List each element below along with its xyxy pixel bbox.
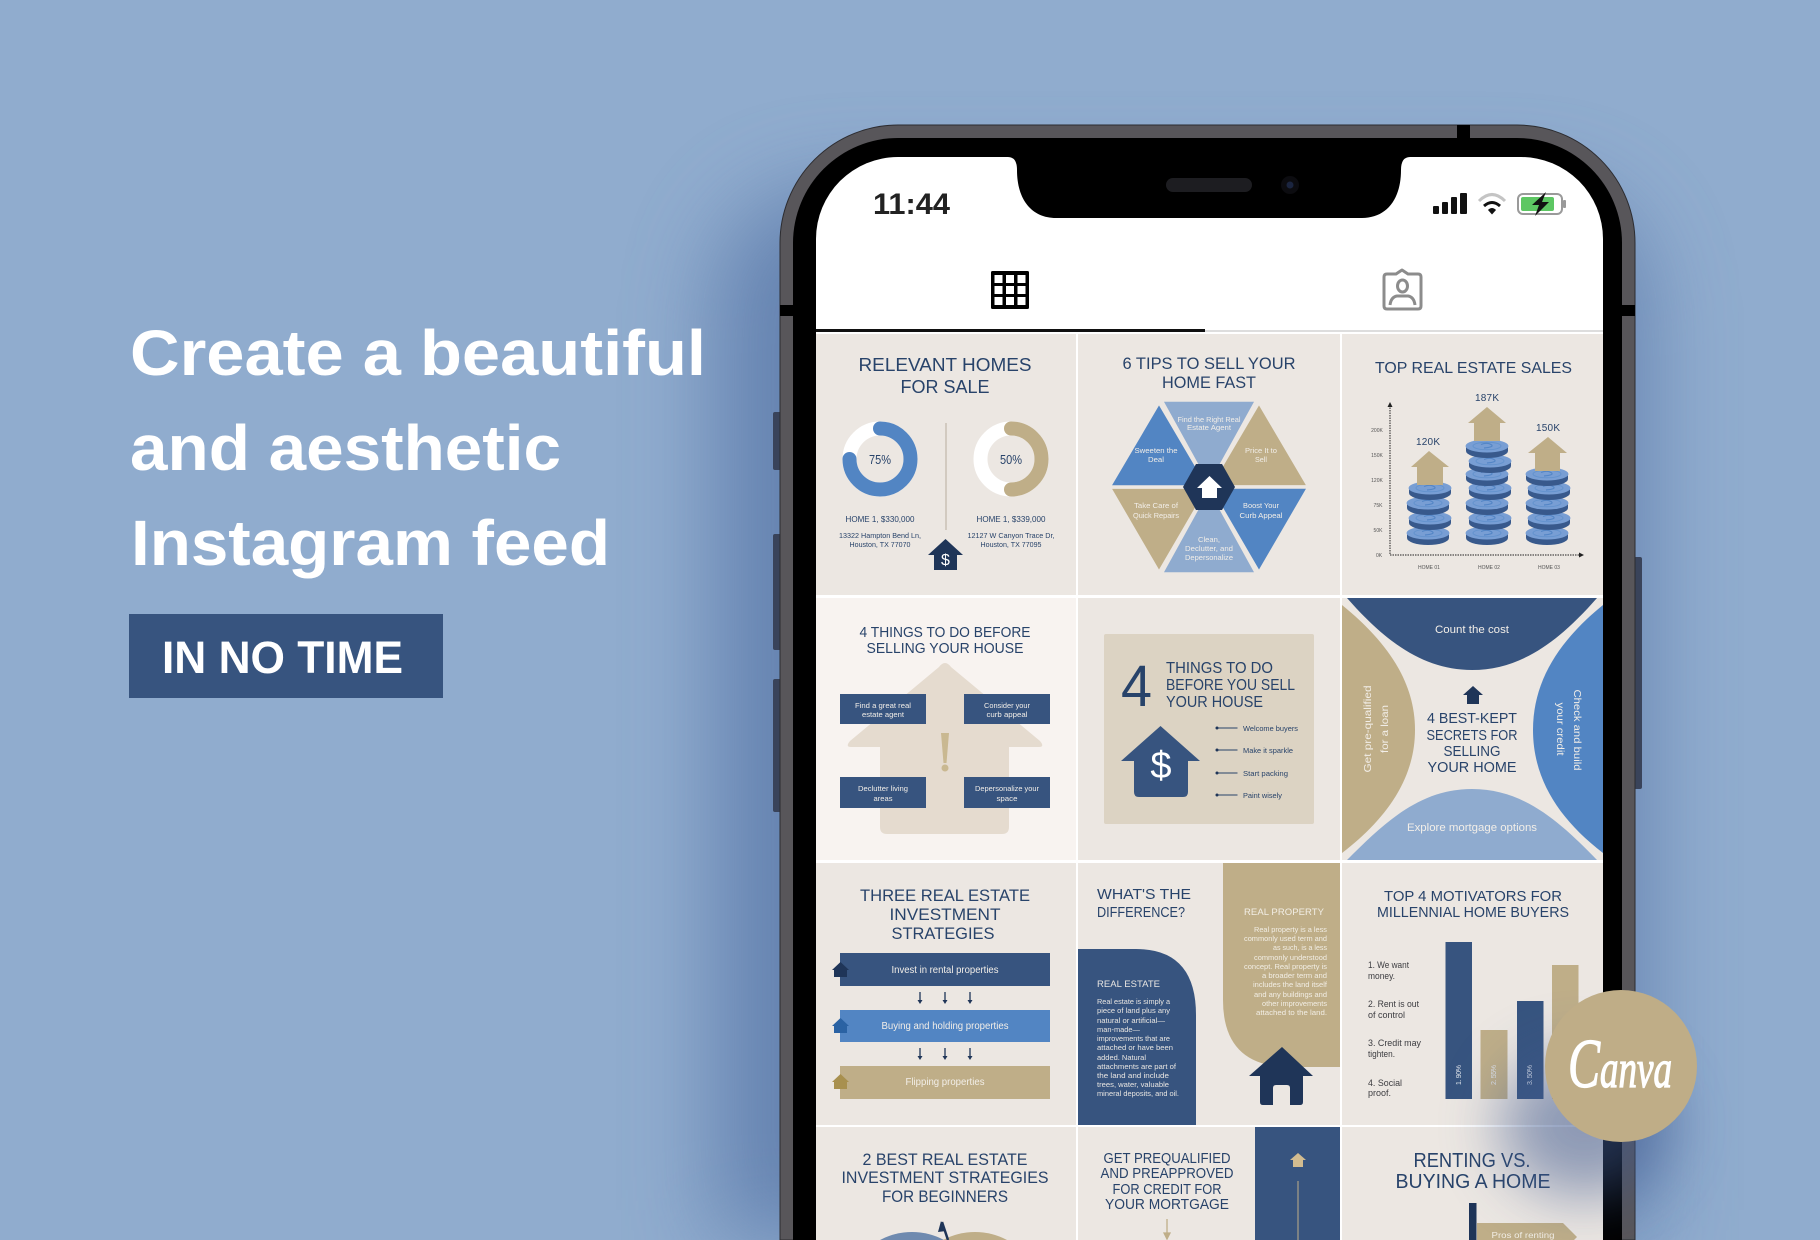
- strategy bars: [832, 953, 1050, 1099]
- title: 4 THINGS TO DO BEFORE: [860, 625, 1031, 641]
- panel: real estate: improvements that are: [1097, 1034, 1170, 1043]
- checklist: Welcome buyers: [1243, 724, 1298, 733]
- shape: check credit: [1533, 605, 1603, 853]
- shape: explore mortgage: Explore mortgage options: [1407, 822, 1538, 834]
- post: six tips: [1078, 334, 1340, 595]
- axis labels: 75K: [1374, 503, 1383, 509]
- title: RENTING VS.: [1414, 1150, 1530, 1172]
- badge: canva logo: [1545, 990, 1697, 1142]
- panel: real property: commonly understood: [1254, 953, 1327, 962]
- title: 2 BEST REAL ESTATE: [862, 1150, 1028, 1169]
- title: STRATEGIES: [892, 924, 994, 943]
- hexagon labels: Estate Agent: [1187, 423, 1232, 432]
- icon: dollar house: [1121, 726, 1200, 797]
- coin stack 1: [1406, 437, 1452, 545]
- title: THINGS TO DO: [1166, 660, 1273, 677]
- home details: HOME 1, $330,000: [846, 514, 915, 524]
- strategy labels: Invest in rental properties: [892, 965, 998, 976]
- arrow down: [1164, 1219, 1170, 1239]
- panel: real estate: [1078, 949, 1196, 1125]
- coin stack 3: 150K: [1536, 423, 1560, 434]
- motivators list: proof.: [1368, 1088, 1391, 1098]
- post: 2 best strategies: [816, 1127, 1076, 1240]
- step labels: Declutter living: [858, 784, 908, 793]
- motivators list: of control: [1368, 1010, 1405, 1020]
- icon: signal: [1433, 193, 1467, 214]
- signpost: [1469, 1203, 1577, 1240]
- panel: real property: a broader term and: [1262, 971, 1327, 980]
- title: [842, 1150, 1048, 1206]
- coin stack 1: 120K: [1416, 437, 1440, 448]
- side panel with arrow: [1255, 1127, 1340, 1240]
- title: YOUR MORTGAGE: [1105, 1196, 1229, 1213]
- title: [1100, 1150, 1234, 1213]
- title: YOUR HOME: [1428, 759, 1516, 776]
- bar chart: [1446, 942, 1578, 1099]
- post: relevant homes: [816, 334, 1076, 595]
- tab underline: [816, 329, 1603, 332]
- panel: real property: REAL PROPERTY: [1244, 907, 1325, 918]
- title: THREE REAL ESTATE: [860, 886, 1030, 905]
- post: top 4 motivators: [1342, 863, 1603, 1125]
- axis labels: HOME 01: [1418, 565, 1440, 571]
- panel: real estate: trees, water, valuable: [1097, 1080, 1169, 1089]
- title: 4 BEST-KEPT: [1427, 710, 1517, 727]
- side buttons: [773, 412, 1642, 812]
- panel: real property: attached to the land.: [1256, 1008, 1327, 1017]
- panel: real estate: natural or artificial—: [1097, 1016, 1165, 1025]
- title: [1377, 888, 1569, 921]
- title: FOR SALE: [900, 377, 990, 397]
- title: TOP 4 MOTIVATORS FOR: [1384, 888, 1562, 905]
- hexagon labels: Boost Your: [1243, 501, 1279, 510]
- title: [1396, 1150, 1550, 1193]
- donut 50 percent: 50%: [1000, 452, 1022, 467]
- shape: count the cost: [1347, 598, 1597, 670]
- strategy labels: Buying and holding properties: [882, 1021, 1008, 1032]
- step labels: Find a great real: [855, 701, 911, 710]
- step labels: [855, 701, 1039, 803]
- title: [1097, 886, 1191, 921]
- canva shadow: [1500, 1053, 1670, 1197]
- status time: 11:44: [873, 188, 950, 221]
- icon: arrow: [1463, 686, 1483, 704]
- shape: check credit: your credit: [1554, 703, 1566, 756]
- motivators list: 4. Social: [1368, 1078, 1402, 1088]
- hexagon labels: Sell: [1255, 455, 1267, 464]
- checklist: Make it sparkle: [1243, 746, 1293, 755]
- hexagon labels: Clean,: [1198, 535, 1220, 544]
- panel: real estate: Real estate is simply a: [1097, 997, 1171, 1006]
- axes: [1390, 405, 1581, 555]
- panel: real property: Real property is a less: [1254, 925, 1327, 934]
- title: INVESTMENT: [890, 905, 1000, 924]
- motivators list: money.: [1368, 971, 1395, 981]
- home details: Houston, TX 77095: [980, 540, 1042, 549]
- motivators list: tighten.: [1368, 1049, 1395, 1059]
- checklist: Start packing: [1243, 769, 1288, 778]
- shape: count the cost: Count the cost: [1435, 624, 1509, 636]
- panel: real property: concept. Real property is: [1244, 962, 1327, 971]
- panel: real estate: added. Natural: [1097, 1053, 1146, 1062]
- panel: real property: commonly used term and: [1244, 934, 1327, 943]
- title: SELLING YOUR HOUSE: [866, 641, 1024, 657]
- axis labels: [1371, 428, 1560, 571]
- home details: 12127 W Canyon Trace Dr,: [968, 531, 1054, 540]
- hexagon labels: Sweeten the: [1134, 446, 1178, 455]
- post: what's the difference: [1078, 863, 1340, 1125]
- panel: real estate: man-made—: [1097, 1025, 1140, 1034]
- title: [860, 627, 1030, 653]
- title: YOUR HOUSE: [1166, 694, 1263, 711]
- panel: real estate: piece of land plus any: [1097, 1006, 1170, 1015]
- title: AND PREAPPROVED: [1100, 1165, 1234, 1182]
- axis labels: 150K: [1371, 453, 1383, 459]
- panel: real property: as such, is a less: [1273, 943, 1327, 952]
- home details: HOME 1, $339,000: [976, 514, 1046, 524]
- hexagon labels: Deal: [1148, 455, 1164, 464]
- icon: dollar house: $: [1150, 745, 1172, 787]
- step labels: Depersonalize your: [975, 784, 1039, 793]
- headline: Instagram feed: [131, 507, 610, 579]
- panel: real estate: attachments are part of: [1097, 1062, 1177, 1071]
- icon: house: [1249, 1047, 1313, 1105]
- shape: get pre-qualified: Get pre-qualified: [1362, 685, 1374, 772]
- title: [860, 358, 1031, 393]
- notch: [1008, 157, 1410, 218]
- badge: in no time: IN NO TIME: [162, 632, 403, 683]
- post: get prequalified: [1078, 1127, 1340, 1240]
- strategy labels: Flipping properties: [906, 1077, 984, 1088]
- axis labels: HOME 03: [1538, 565, 1560, 571]
- icon: dollar house: [928, 539, 963, 570]
- panel: real property: includes the land itself: [1253, 980, 1328, 989]
- bar chart: 1. 90%: [1456, 1065, 1463, 1085]
- hexagon labels: Find the Right Real: [1178, 415, 1241, 424]
- motivators list: 3. Credit may: [1368, 1038, 1421, 1048]
- hexagon labels: [1133, 415, 1283, 562]
- badge: in no time: [129, 614, 443, 698]
- step labels: areas: [874, 794, 893, 803]
- shape: explore mortgage: [1347, 789, 1597, 860]
- axis labels: HOME 02: [1478, 565, 1500, 571]
- checklist: [1216, 724, 1298, 800]
- panel: real estate: the land and include: [1097, 1071, 1169, 1080]
- step labels: space: [996, 794, 1018, 803]
- title: [1166, 662, 1295, 707]
- motivators list: [1368, 960, 1421, 1098]
- title: BUYING A HOME: [1396, 1171, 1550, 1193]
- title: INVESTMENT STRATEGIES: [842, 1168, 1048, 1187]
- post: renting vs buying: [1342, 1127, 1603, 1240]
- badge: canva logo: Canva: [1568, 1026, 1672, 1103]
- donut 50 percent: [980, 428, 1042, 490]
- big numeral: 4: [1121, 654, 1152, 719]
- motivators list: 1. We want: [1368, 960, 1409, 970]
- icon: tagged tab: [1384, 270, 1421, 309]
- title: [860, 886, 1030, 943]
- divider: [946, 423, 947, 530]
- hexagon labels: Depersonalize: [1185, 553, 1233, 562]
- axis labels: 200K: [1371, 428, 1383, 434]
- icon: dollar house: $: [941, 552, 950, 569]
- axis labels: 50K: [1374, 528, 1383, 534]
- step labels: Consider your: [984, 701, 1030, 710]
- headline: [130, 317, 706, 579]
- hexagon labels: Take Care of: [1134, 501, 1179, 510]
- icon: grid tab: [991, 271, 1029, 309]
- screen: [816, 157, 1603, 1240]
- panel: real property: and any buildings and: [1254, 990, 1327, 999]
- axis labels: 120K: [1371, 478, 1383, 484]
- donut 75 percent: [850, 428, 910, 490]
- coin stack 2: 187K: [1475, 393, 1499, 404]
- signpost: Pros of renting: [1492, 1230, 1555, 1240]
- axis labels: 0K: [1376, 553, 1383, 559]
- phone shadow: [715, 190, 1645, 1240]
- shape: check credit: Check and build: [1571, 689, 1583, 771]
- phone frame: [780, 125, 1635, 1240]
- down arrows: [918, 992, 972, 1060]
- title: DIFFERENCE?: [1097, 904, 1185, 921]
- post: top real estate sales: [1342, 334, 1603, 595]
- panel: real estate: mineral deposits, and oil.: [1097, 1089, 1179, 1098]
- icon: wifi: [1479, 194, 1505, 214]
- title: 6 TIPS TO SELL YOUR: [1122, 354, 1296, 373]
- post: three strategies: [816, 863, 1076, 1125]
- hexagon diagram: [1109, 400, 1309, 574]
- title: WHAT'S THE: [1097, 886, 1191, 903]
- post: best-kept secrets: [1342, 598, 1603, 860]
- title: FOR BEGINNERS: [882, 1187, 1008, 1206]
- title: RELEVANT HOMES: [858, 355, 1032, 375]
- title: TOP REAL ESTATE SALES: [1375, 360, 1572, 377]
- checklist: Paint wisely: [1243, 791, 1282, 800]
- panel: real property: other improvements: [1262, 999, 1327, 1008]
- hexagon labels: Price It to: [1245, 446, 1277, 455]
- post: things to do before you sell: [1078, 598, 1340, 860]
- big arrow: [848, 663, 1042, 834]
- panel: real property: [1223, 863, 1340, 1067]
- bar chart: 3. 50%: [1527, 1065, 1534, 1085]
- step boxes: [840, 694, 1050, 808]
- coin stack 3: [1526, 423, 1570, 545]
- panel: real estate: REAL ESTATE: [1097, 979, 1160, 990]
- donut 75 percent: 75%: [869, 452, 891, 467]
- home details: 13322 Hampton Bend Ln,: [839, 531, 921, 540]
- title: MILLENNIAL HOME BUYERS: [1377, 904, 1569, 921]
- phone mockup: [773, 125, 1642, 1240]
- coin stack 2: [1466, 393, 1512, 545]
- exclamation mark: [941, 733, 949, 772]
- title: BEFORE YOU SELL: [1166, 677, 1295, 694]
- hexagon labels: Declutter, and: [1185, 544, 1233, 553]
- step labels: estate agent: [862, 710, 905, 719]
- title: GET PREQUALIFIED: [1104, 1150, 1231, 1167]
- shape: get pre-qualified: [1342, 605, 1415, 853]
- title: [1427, 713, 1517, 772]
- panel: real estate: attached or have been: [1097, 1043, 1173, 1052]
- post: 4 things before selling: [816, 598, 1076, 860]
- home details: [839, 514, 1054, 549]
- hexagon labels: Curb Appeal: [1240, 511, 1283, 520]
- title: SECRETS FOR: [1426, 727, 1518, 744]
- shape: get pre-qualified: for a loan: [1379, 705, 1391, 753]
- bar chart: 2. 55%: [1491, 1065, 1498, 1085]
- title: HOME FAST: [1162, 373, 1256, 392]
- headline: and aesthetic: [130, 412, 561, 484]
- title: FOR CREDIT FOR: [1112, 1181, 1222, 1198]
- title: SELLING: [1444, 743, 1500, 760]
- hexagon labels: Quick Repairs: [1133, 511, 1179, 520]
- headline: Create a beautiful: [130, 317, 706, 389]
- step labels: curb appeal: [986, 710, 1028, 719]
- strategy labels: [882, 965, 1008, 1088]
- title: [1123, 358, 1295, 388]
- venn circles and arrow: [880, 1221, 1007, 1240]
- home details: Houston, TX 77070: [850, 540, 910, 549]
- icon: battery: [1518, 192, 1566, 216]
- motivators list: 2. Rent is out: [1368, 999, 1419, 1009]
